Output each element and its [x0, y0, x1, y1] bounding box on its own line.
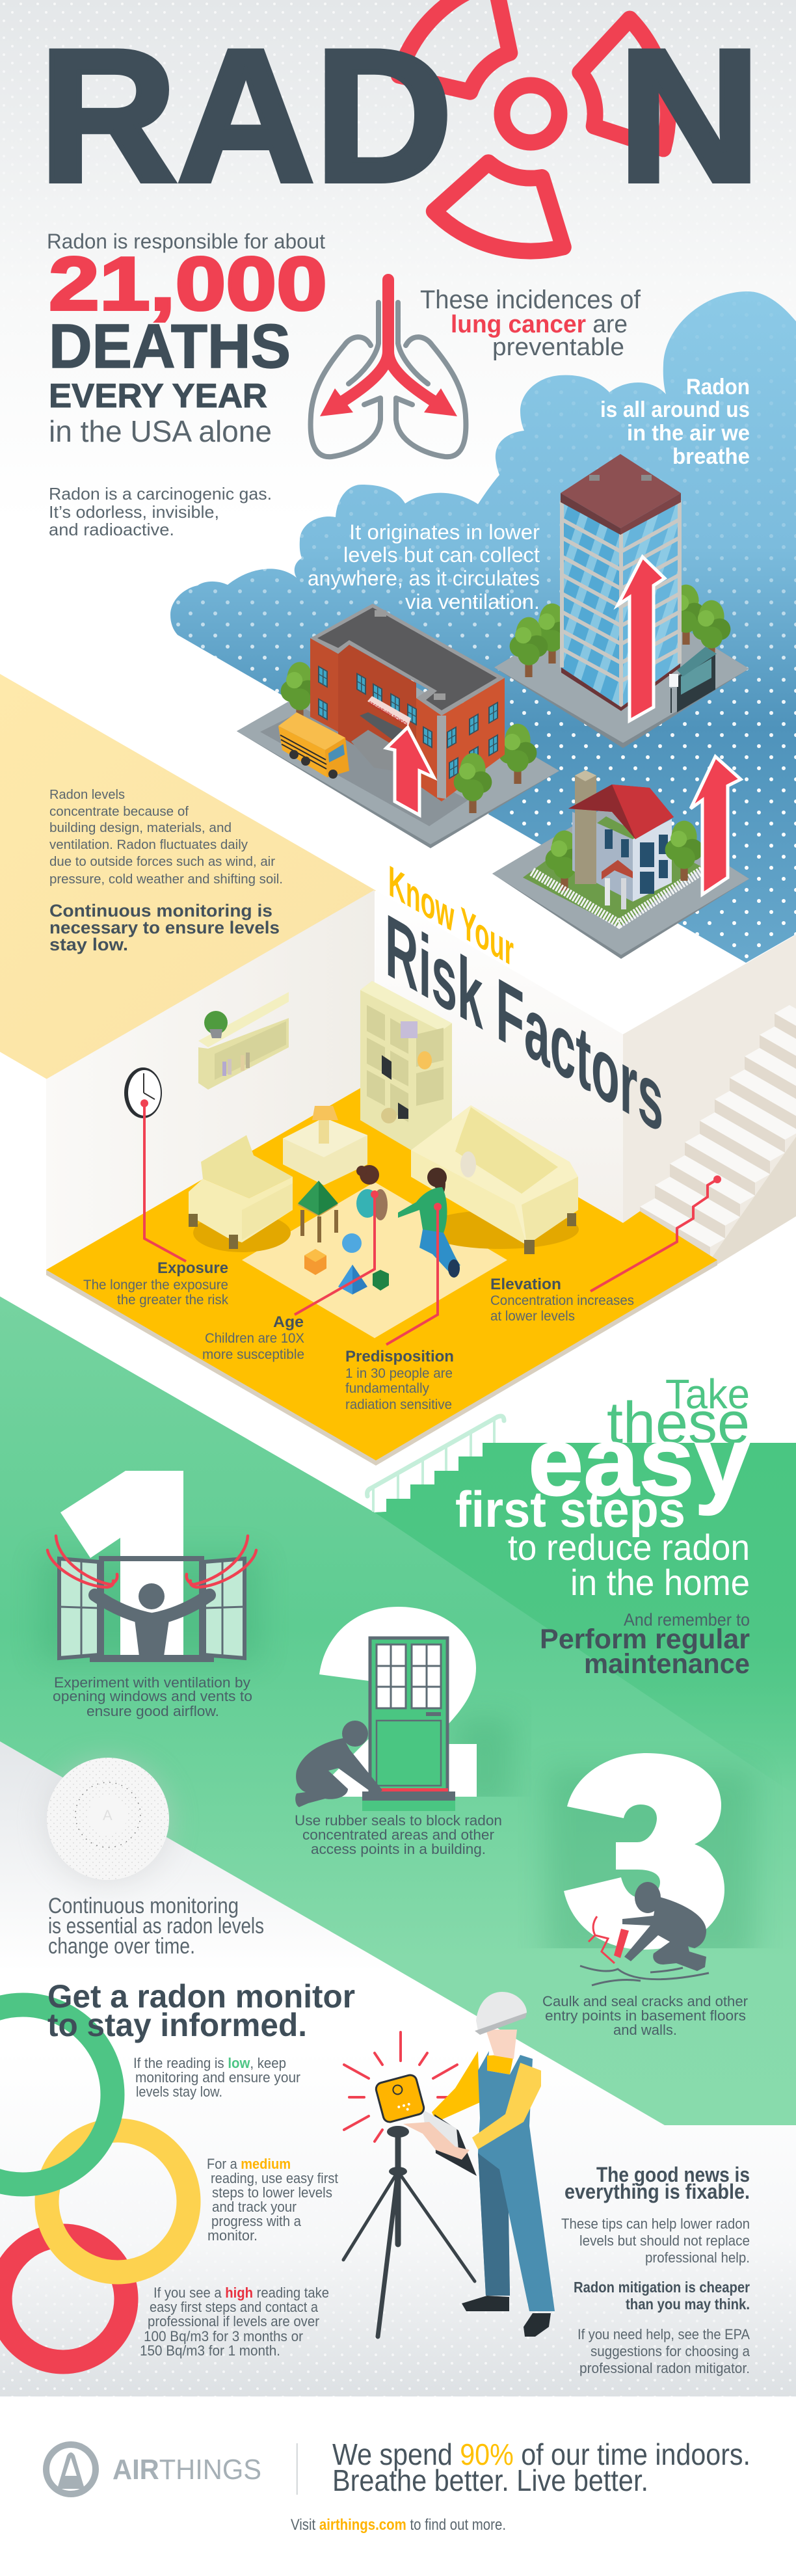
risk factor: predisposition: 1 in 30 people are	[345, 1366, 453, 1381]
radon device	[375, 2074, 425, 2123]
high reading text: 100 Bq/m3 for 3 months or	[144, 2328, 303, 2344]
tripod	[343, 2126, 475, 2337]
child with teddy bear	[356, 1165, 388, 1220]
background: top dotted gray gradient	[0, 0, 796, 286]
risk factor: elevation: Elevation	[490, 1276, 561, 1293]
radon monitor device: A	[103, 1807, 113, 1823]
risk factor: predisposition: radiation sensitive	[345, 1397, 452, 1412]
monitoring text	[48, 1894, 264, 1959]
arrow up: school	[386, 727, 434, 815]
heading: take these easy first steps: in the home	[570, 1562, 750, 1603]
risk factor: exposure: Exposure	[157, 1259, 228, 1277]
school platform	[237, 604, 559, 848]
number 2	[319, 1607, 477, 1797]
tower building platform	[494, 454, 749, 748]
medium reading text: For a medium	[207, 2156, 291, 2172]
radon levels text: concentrate because of	[49, 805, 189, 819]
tips text: professional help.	[645, 2249, 750, 2266]
panel: green steps background	[0, 1296, 796, 2125]
medium reading text: reading, use easy first	[211, 2170, 338, 2186]
medium reading text	[207, 2156, 338, 2244]
tree left of house	[546, 831, 583, 891]
step 2 text	[295, 1812, 502, 1857]
step 2: kneeling person	[295, 1721, 382, 1807]
headline statistic: in the USA alone	[49, 414, 272, 448]
lung cancer text: lung cancer are	[451, 311, 628, 338]
heading: take these easy first steps	[455, 1371, 750, 1603]
tower	[561, 454, 681, 711]
toy table and pyramid	[297, 1181, 338, 1242]
maintenance reminder	[540, 1610, 750, 1680]
school building	[310, 604, 505, 801]
risk factor: exposure: The longer the exposure	[83, 1278, 228, 1293]
risk factor: exposure	[83, 1259, 228, 1308]
medium reading text: monitor.	[207, 2227, 258, 2244]
toys on rug	[304, 1233, 389, 1295]
heading: take these easy first steps: easy	[528, 1406, 750, 1516]
mother kneeling	[398, 1168, 460, 1278]
risk factor: age	[202, 1313, 304, 1362]
step 1 text: ensure good airflow.	[86, 1703, 219, 1719]
heading: get a radon monitor: to stay informed.	[47, 2007, 307, 2043]
title: N	[618, 10, 761, 221]
heading: get a radon monitor	[47, 1978, 355, 2043]
panel: yellow triangle	[0, 674, 376, 1080]
panel: room walls	[46, 890, 796, 1270]
risk factor: predisposition	[345, 1348, 454, 1412]
cloud text: originates in lower levels: levels but can collect	[343, 543, 540, 567]
radon levels text: pressure, cold weather and shifting soil.	[49, 872, 283, 887]
radon monitor device	[47, 1758, 169, 1883]
bottom gray dotted background	[0, 2220, 796, 2396]
arrow up: house	[691, 757, 741, 894]
armchair	[189, 1135, 293, 1252]
lung cancer text	[420, 286, 641, 361]
stair railing	[367, 1416, 504, 1512]
maintenance reminder: Perform regular	[540, 1624, 750, 1655]
good news heading: The good news is	[596, 2163, 750, 2186]
person opening window	[95, 1583, 209, 1656]
radiation symbol	[395, 0, 698, 251]
title	[39, 10, 761, 221]
picket fence	[532, 870, 702, 924]
good news heading	[564, 2163, 750, 2203]
carcinogenic gas text	[49, 484, 272, 539]
high reading text	[140, 2285, 329, 2359]
radon levels text: ventilation. Radon fluctuates daily	[49, 838, 248, 852]
house platform	[492, 757, 749, 959]
number 3	[564, 1753, 724, 1950]
headline statistic	[47, 230, 327, 448]
footer divider	[297, 2443, 298, 2495]
heading: take these easy first steps: first steps	[455, 1481, 685, 1538]
step 3 text: entry points in basement floors	[545, 2007, 746, 2024]
mitigation cost statement	[574, 2279, 750, 2313]
radon levels text	[49, 788, 283, 887]
cloud text: originates in lower levels: via ventilation.	[405, 590, 540, 613]
continuous monitoring statement	[49, 901, 280, 954]
red airflow arcs	[47, 1536, 256, 1587]
heading: take these easy first steps: these	[607, 1391, 750, 1456]
mitigation cost statement: than you may think.	[626, 2296, 750, 2313]
headline statistic: DEATHS	[49, 312, 291, 381]
tips text	[561, 2216, 750, 2266]
step 1: window icon	[47, 1536, 256, 1662]
cloud text: radon all around: breathe	[672, 444, 750, 469]
head and hard hat	[475, 1992, 527, 2059]
panel: blue cloud sky	[170, 291, 796, 963]
radon levels text: due to outside forces such as wind, air	[49, 855, 275, 869]
headline statistic: EVERY YEAR	[49, 377, 267, 415]
side table with lamp	[283, 1106, 367, 1185]
risk factor: predisposition: fundamentally	[345, 1381, 429, 1396]
step 2 text: Use rubber seals to block radon	[295, 1812, 502, 1829]
EPA text	[577, 2326, 750, 2376]
bookshelf	[360, 981, 452, 1150]
cloud text: originates in lower levels: It originates in lower	[349, 520, 540, 544]
worker with monitor on tripod	[343, 1992, 555, 2337]
step 3: person caulking crack	[580, 1882, 709, 1985]
medium reading text: and track your	[212, 2199, 297, 2215]
school building: SECONDARY SCHOOL	[369, 700, 408, 728]
lung cancer text: preventable	[492, 334, 624, 361]
mitigation cost statement: Radon mitigation is cheaper	[574, 2279, 750, 2296]
lung cancer text: These incidences of	[420, 286, 641, 314]
carcinogenic gas text: and radioactive.	[49, 520, 174, 539]
staircase	[640, 1005, 796, 1265]
title: RAD	[39, 10, 453, 221]
tree right of house	[665, 821, 703, 881]
low reading text: levels stay low.	[136, 2084, 222, 2100]
cloud text: radon all around: is all around us	[600, 397, 750, 422]
tree front of school	[454, 753, 492, 813]
medium reading text: progress with a	[211, 2213, 302, 2229]
step 1 text: opening windows and vents to	[53, 1688, 252, 1704]
step 3 text: Caulk and seal cracks and other	[542, 1993, 748, 2009]
low reading text: monitoring and ensure your	[135, 2069, 300, 2086]
footer logo: AIRTHINGS	[113, 2454, 261, 2486]
monitoring text: Continuous monitoring	[48, 1894, 239, 1918]
risk factor: age: more susceptible	[202, 1347, 304, 1362]
carcinogenic gas text: It’s odorless, invisible,	[49, 502, 219, 522]
monitoring text: is essential as radon levels	[48, 1914, 264, 1939]
low reading text: If the reading is low, keep	[133, 2055, 286, 2071]
continuous monitoring statement: stay low.	[49, 935, 128, 954]
signal rays	[344, 2032, 457, 2141]
clipboard	[403, 2110, 477, 2176]
risk factor: exposure: the greater the risk	[117, 1293, 228, 1308]
reading level rings	[0, 2005, 189, 2362]
risk factor: elevation: Concentration increases	[490, 1293, 634, 1308]
tips text: These tips can help lower radon	[561, 2216, 750, 2232]
step 1 text	[53, 1674, 252, 1719]
cloud text: originates in lower levels: anywhere, as it circulates	[308, 567, 540, 590]
risk factor: elevation	[490, 1276, 634, 1324]
step 2 text: access points in a building.	[311, 1841, 486, 1857]
cloud text: radon all around: in the air we	[627, 421, 750, 446]
carcinogenic gas text: Radon is a carcinogenic gas.	[49, 484, 272, 503]
headline statistic: 21,000	[49, 241, 327, 326]
sofa	[411, 1105, 579, 1254]
icon: lungs with red arrows	[311, 280, 466, 457]
risk factor: elevation: at lower levels	[490, 1309, 575, 1324]
step 3 text	[542, 1993, 748, 2038]
radon levels text: building design, materials, and	[49, 821, 232, 835]
risk factor: age: Children are 10X	[205, 1331, 304, 1346]
room floor	[46, 1080, 717, 1466]
step 3 text: and walls.	[613, 2022, 677, 2038]
low reading text	[133, 2055, 300, 2100]
headline statistic: Radon is responsible for about	[47, 230, 325, 253]
trees at school	[281, 662, 537, 784]
high reading text: 150 Bq/m3 for 1 month.	[140, 2342, 280, 2359]
cloud text: radon all around	[600, 375, 750, 469]
house	[568, 770, 674, 909]
high reading text: professional if levels are over	[148, 2313, 319, 2329]
step 2 text: concentrated areas and other	[302, 1827, 494, 1843]
bus shelter	[669, 647, 717, 713]
risk factor: predisposition: Predisposition	[345, 1348, 454, 1365]
footer tagline: We spend 90% of our time indoors.	[332, 2437, 750, 2471]
good news heading: everything is fixable.	[564, 2180, 750, 2203]
EPA text: suggestions for choosing a	[590, 2343, 750, 2359]
monitoring text: change over time.	[48, 1934, 195, 1959]
footer logo	[46, 2445, 261, 2494]
footer link text: Visit airthings.com to find out more.	[291, 2516, 506, 2534]
clock	[124, 1067, 162, 1118]
cloud text: originates in lower levels	[308, 520, 540, 613]
heading: take these easy first steps: to reduce radon	[508, 1527, 750, 1568]
school bus	[278, 712, 349, 779]
arrow up: tower	[618, 557, 665, 721]
maintenance reminder: maintenance	[584, 1648, 750, 1680]
risk factor: age: Age	[273, 1313, 304, 1331]
callout lines	[140, 1099, 721, 1345]
radon levels text: Radon levels	[49, 788, 125, 802]
step 1 text: Experiment with ventilation by	[54, 1674, 250, 1691]
heading: get a radon monitor: Get a radon monitor	[47, 1978, 355, 2015]
high reading text: If you see a high reading take	[153, 2285, 329, 2301]
number shadows	[39, 1555, 754, 1965]
medium reading text: steps to lower levels	[212, 2184, 332, 2201]
continuous monitoring statement: necessary to ensure levels	[49, 918, 280, 937]
gray panel under monitor	[0, 1741, 665, 2125]
high reading text: easy first steps and contact a	[150, 2299, 319, 2315]
trees at tower	[510, 585, 730, 677]
overalls and arms	[432, 2051, 555, 2337]
tips text: levels but should not replace	[579, 2233, 750, 2249]
wall shelf with plant	[198, 992, 289, 1090]
EPA text: If you need help, see the EPA	[577, 2326, 750, 2342]
maintenance reminder: And remember to	[624, 1610, 750, 1630]
cloud text: radon all around: Radon	[686, 375, 750, 399]
continuous monitoring statement: Continuous monitoring is	[49, 901, 272, 920]
know your heading: Know Your	[388, 856, 514, 976]
step 2: door with seal	[362, 1638, 455, 1811]
footer tagline	[332, 2437, 750, 2497]
EPA text: professional radon mitigator.	[579, 2360, 750, 2376]
number 1	[60, 1471, 183, 1655]
footer tagline: Breathe better. Live better.	[332, 2463, 648, 2497]
heading: take these easy first steps: Take	[665, 1371, 750, 1417]
